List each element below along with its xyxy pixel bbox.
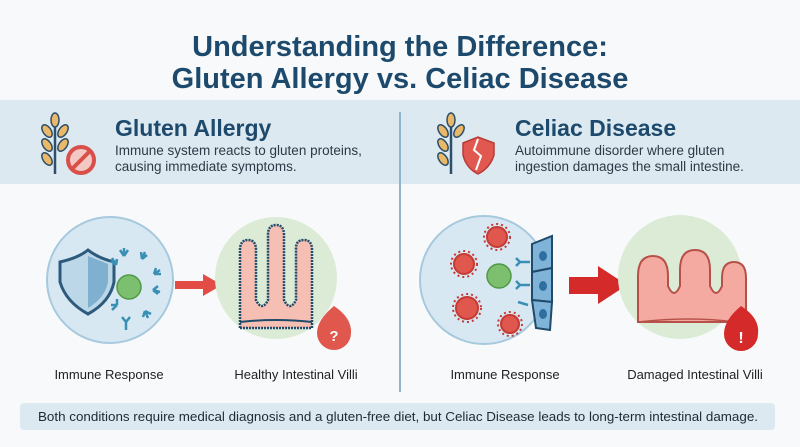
text: gluten allergy description: Immune system reacts to gluten proteins, xyxy=(115,143,362,158)
illustration: damaged villi: ! xyxy=(738,330,744,347)
panel: celiac disease header xyxy=(436,113,744,174)
illustration: celiac immune response xyxy=(420,216,552,344)
illustration: healthy villi: ? xyxy=(329,328,339,345)
icon: wheat with prohibition xyxy=(40,113,94,174)
illustration: healthy villi xyxy=(215,217,351,350)
heading: Gluten Allergy: Gluten Allergy xyxy=(115,115,272,141)
title xyxy=(172,31,628,95)
icon: wheat with broken shield xyxy=(436,113,494,174)
text: celiac description: ingestion damages the small intestine. xyxy=(515,159,744,174)
labels xyxy=(54,367,763,382)
callout: bottom summary xyxy=(20,403,775,430)
heading: Celiac Disease: Celiac Disease xyxy=(515,115,676,141)
labels: Damaged Intestinal Villi xyxy=(627,367,763,382)
illustration: damaged villi xyxy=(618,215,758,351)
title: Understanding the Difference: xyxy=(192,31,608,63)
labels: Immune Response xyxy=(450,367,560,382)
illustration: allergy immune response xyxy=(47,217,173,343)
labels: Immune Response xyxy=(54,367,164,382)
header band xyxy=(0,100,800,184)
divider xyxy=(399,112,401,392)
panel: gluten allergy header xyxy=(40,113,362,174)
callout: bottom summary: Both conditions require medical diagnosis and a gluten-free diet, but Celiac Disease leads to long-term intestinal damage. xyxy=(38,410,758,424)
text: celiac description: Autoimmune disorder where gluten xyxy=(515,143,724,158)
labels: Healthy Intestinal Villi xyxy=(234,367,358,382)
title: Gluten Allergy vs. Celiac Disease xyxy=(172,63,628,95)
text: gluten allergy description: causing immediate symptoms. xyxy=(115,159,297,174)
arrow: right xyxy=(569,266,627,304)
arrow: left xyxy=(175,274,222,296)
